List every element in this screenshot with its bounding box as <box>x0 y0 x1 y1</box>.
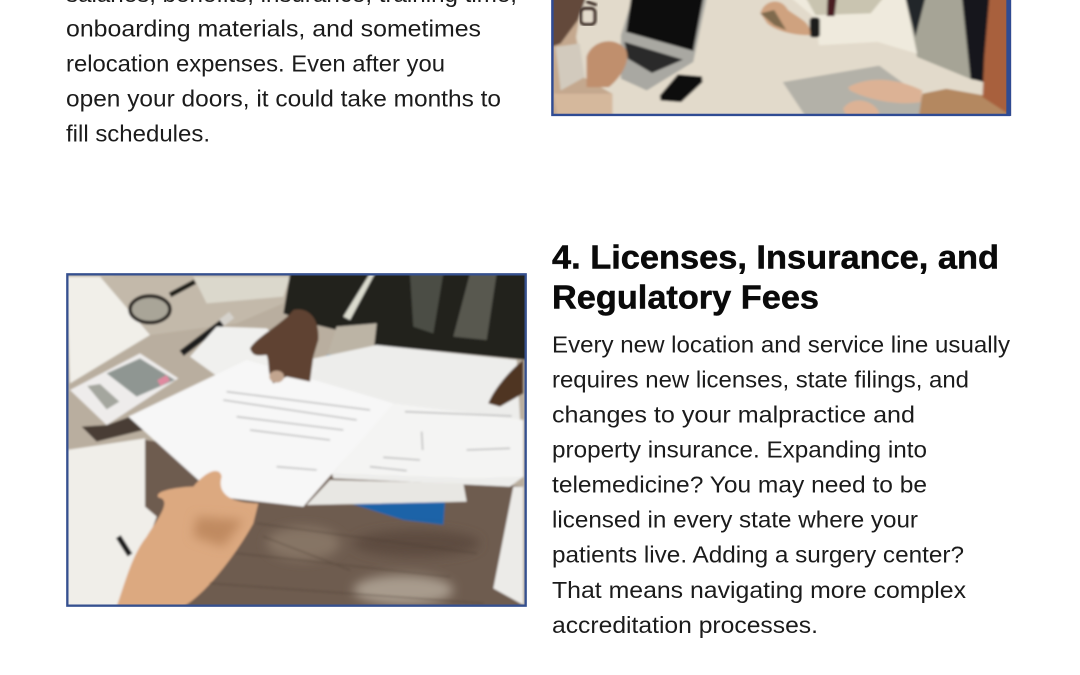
heading: licenses, insurance and regulatory fees: 4. Licenses, Insurance, and <box>552 238 999 276</box>
laptop <box>621 0 707 90</box>
tablet <box>783 66 922 116</box>
photo frame <box>67 274 526 606</box>
white blazer <box>790 0 917 54</box>
watch and hands <box>810 17 820 38</box>
photo: team meeting around a table <box>551 0 1011 116</box>
calculator <box>70 353 178 425</box>
left person <box>554 16 612 114</box>
text block: licenses paragraph <box>552 332 1011 638</box>
dark hand right <box>488 360 523 407</box>
left bottom paper <box>67 438 157 607</box>
black top <box>960 0 992 83</box>
light hand <box>117 471 258 607</box>
red hair <box>983 0 1011 116</box>
phone <box>660 74 703 102</box>
text block: licenses paragraph: requires new licenses, state filings, and <box>552 367 969 393</box>
dark hand top <box>250 309 318 383</box>
pen <box>182 317 230 353</box>
text block: section 3 closing paragraph: onboarding materials, and sometimes <box>66 16 481 42</box>
right-side paper <box>493 487 523 605</box>
dark suit <box>283 273 527 360</box>
heading: licenses, insurance and regulatory fees: Regulatory Fees <box>552 278 819 316</box>
text block: licenses paragraph: patients live. Adding a surgery center? <box>552 542 964 568</box>
wood grain <box>210 527 450 601</box>
heading: licenses, insurance and regulatory fees <box>552 238 999 316</box>
text block: licenses paragraph: Every new location and service line usually <box>552 332 1011 358</box>
top-left paper <box>67 277 150 383</box>
text block: section 3 closing paragraph <box>66 0 517 146</box>
shading on the hand and wood patches <box>193 517 480 605</box>
pen bottom <box>118 537 130 555</box>
wood desk <box>144 439 524 604</box>
text block: licenses paragraph: property insurance. Expanding into <box>552 437 927 463</box>
text block: licenses paragraph: accreditation processes. <box>552 612 818 638</box>
photo: two people exchanging paperwork over a desk <box>67 273 527 607</box>
grey chair <box>905 0 974 80</box>
text block: licenses paragraph: licensed in every state where your <box>552 507 918 533</box>
text block: section 3 closing paragraph: relocation expenses. Even after you <box>66 50 445 76</box>
blue folder <box>350 502 445 525</box>
text block: section 3 closing paragraph: open your doors, it could take months to <box>66 86 501 112</box>
front document <box>128 360 393 507</box>
back documents <box>307 345 523 487</box>
tan sleeve <box>919 89 1011 116</box>
right hand <box>848 80 922 103</box>
magnifier <box>170 282 195 295</box>
text block: licenses paragraph: changes to your malpractice and <box>552 402 915 428</box>
text block: section 3 closing paragraph: fill schedules. <box>66 120 210 146</box>
document print lines <box>223 392 512 471</box>
glasses <box>581 2 597 24</box>
photo frame <box>552 0 1009 115</box>
text block: licenses paragraph: That means navigating more complex <box>552 577 967 603</box>
text block: licenses paragraph: telemedicine? You may need to be <box>552 472 927 498</box>
